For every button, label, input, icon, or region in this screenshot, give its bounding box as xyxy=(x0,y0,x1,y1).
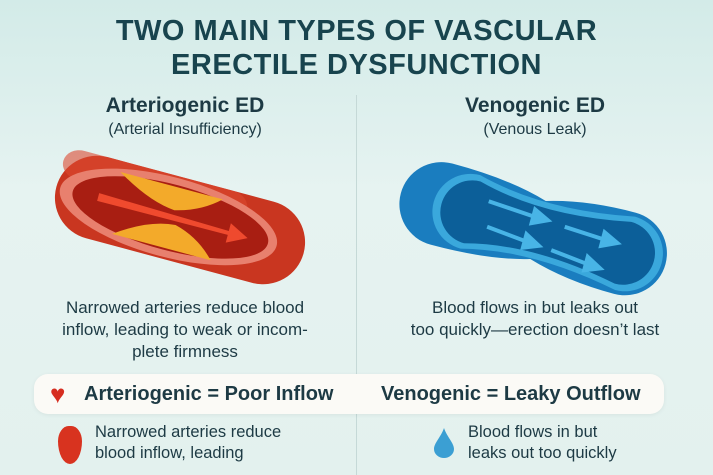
title: TWO MAIN TYPES OF VASCULAR xyxy=(116,15,597,47)
summary banner xyxy=(34,374,664,414)
heading: arteriogenic xyxy=(106,94,264,138)
divider line xyxy=(356,95,357,475)
text: arteriogenic description: inflow, leading to weak or incom- xyxy=(62,320,308,339)
footer text right: Blood flows in but xyxy=(468,423,597,441)
icon: heart: ♥ xyxy=(50,379,65,409)
illustration: artery xyxy=(54,150,306,284)
illustration: vein xyxy=(399,162,667,296)
footer: arteriogenic xyxy=(58,423,281,464)
footer text left: blood inflow, leading xyxy=(95,444,244,462)
title: ERECTILE DYSFUNCTION xyxy=(171,49,542,81)
heading: arteriogenic: Arteriogenic ED xyxy=(106,94,264,117)
text: venogenic description: Blood flows in but leaks out xyxy=(432,298,638,317)
text: venogenic description: too quickly—erection doesn’t last xyxy=(411,320,659,339)
banner text: arteriogenic: Arteriogenic = Poor Inflow xyxy=(84,383,333,405)
title xyxy=(116,15,597,81)
banner text: venogenic: Venogenic = Leaky Outflow xyxy=(381,383,641,405)
icon: water drop xyxy=(434,428,454,458)
text: arteriogenic description: Narrowed arteries reduce blood xyxy=(66,298,304,317)
footer text left: Narrowed arteries reduce xyxy=(95,423,281,441)
text: arteriogenic description: plete firmness xyxy=(132,342,238,361)
heading: venogenic: (Venous Leak) xyxy=(483,121,587,138)
footer: venogenic xyxy=(434,423,617,462)
icon: anatomical heart xyxy=(58,426,82,464)
footer text right: leaks out too quickly xyxy=(468,444,617,462)
footer text left xyxy=(95,423,281,462)
text: venogenic description xyxy=(411,298,660,339)
heading: arteriogenic: (Arterial Insufficiency) xyxy=(108,121,262,138)
text: arteriogenic description xyxy=(62,298,308,361)
heading: venogenic xyxy=(465,94,605,138)
footer text right xyxy=(468,423,617,462)
heading: venogenic: Venogenic ED xyxy=(465,94,605,117)
